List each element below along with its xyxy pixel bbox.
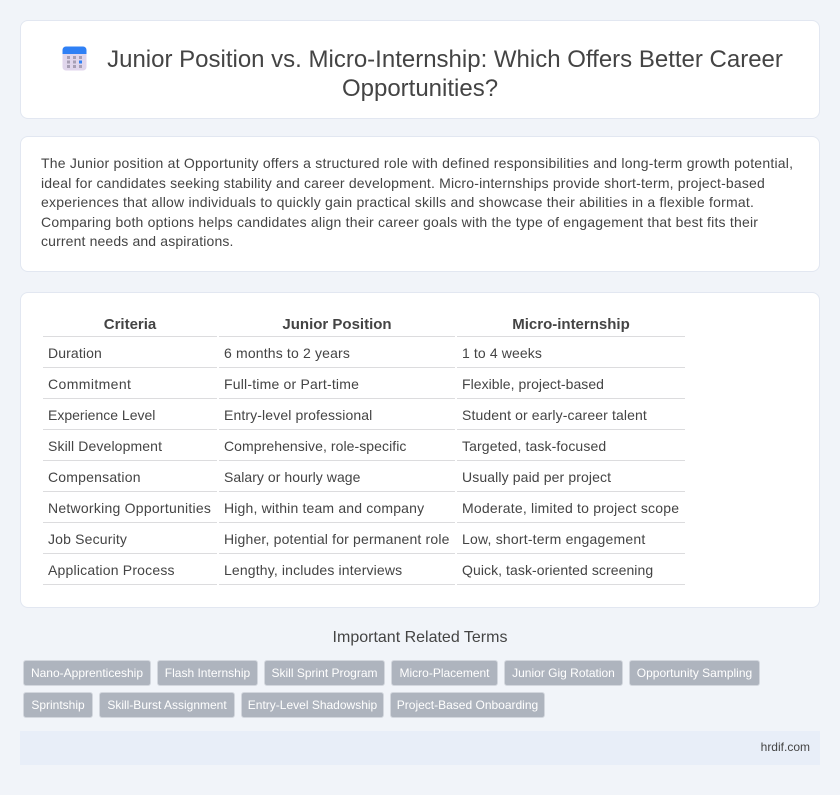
icon: calendar [62, 46, 86, 70]
table: comparison: Quick, task-oriented screening [462, 562, 653, 578]
table: comparison: Low, short-term engagement [462, 531, 645, 547]
tag list: related terms [23, 660, 760, 718]
table: comparison: Flexible, project-based [462, 376, 604, 392]
text block: introduction [41, 155, 793, 249]
table: comparison: High, within team and company [224, 500, 424, 516]
title: Opportunities? [342, 75, 498, 102]
table: comparison [43, 316, 685, 585]
title [107, 46, 783, 102]
table header [104, 316, 630, 333]
text block: introduction: Comparing both options helps candidates align their career goals with the type of engagement that best fits their [41, 214, 758, 230]
table: comparison: Application Process [48, 562, 175, 578]
tag list: related terms: Junior Gig Rotation [512, 666, 615, 680]
table: comparison: Compensation [48, 469, 141, 485]
panel: header [20, 20, 820, 119]
text block: introduction: current needs and aspirations. [41, 233, 234, 249]
table header: Junior Position [282, 316, 392, 333]
heading: related terms: Important Related Terms [333, 629, 507, 646]
footer bar [20, 731, 820, 765]
table header: Criteria [104, 316, 156, 333]
table: comparison: Job Security [48, 531, 127, 547]
table: comparison: 6 months to 2 years [224, 345, 350, 361]
tag list: related terms: Opportunity Sampling [637, 666, 752, 680]
footer source: hrdif.com [761, 740, 810, 754]
table: comparison: Comprehensive, role-specific [224, 438, 406, 454]
table: comparison: Higher, potential for permanent role [224, 531, 450, 547]
table: comparison: Moderate, limited to project scope [462, 500, 679, 516]
table: comparison: Student or early-career talent [462, 407, 647, 423]
table: comparison: Networking Opportunities [48, 500, 211, 516]
tag list: related terms: Project-Based Onboarding [397, 698, 538, 712]
tag list: related terms: Sprintship [31, 698, 85, 712]
text block: introduction: ideal for candidates seeking stability and career development. Micro-internships provide short-term, project-based [41, 175, 765, 191]
tag list: related terms: Nano-Apprenticeship [31, 666, 143, 680]
table: comparison: Commitment [48, 376, 131, 392]
table: comparison: Skill Development [48, 438, 162, 454]
panel: introduction [20, 136, 820, 272]
tag list: related terms: Flash Internship [165, 666, 250, 680]
tag list: related terms: Micro-Placement [399, 666, 490, 680]
table header: Micro-internship [512, 316, 630, 333]
table: comparison: Salary or hourly wage [224, 469, 360, 485]
table: comparison: 1 to 4 weeks [462, 345, 542, 361]
table: comparison: Usually paid per project [462, 469, 611, 485]
table: comparison: Experience Level [48, 407, 155, 423]
text block: introduction: experiences that allow individuals to quickly gain practical skills and showcase their abilities in a flexible format. [41, 194, 754, 210]
table: comparison: Lengthy, includes interviews [224, 562, 402, 578]
table: comparison: Entry-level professional [224, 407, 372, 423]
tag list: related terms: Skill-Burst Assignment [107, 698, 227, 712]
tag list: related terms: Entry-Level Shadowship [248, 698, 377, 712]
table: comparison: Targeted, task-focused [462, 438, 606, 454]
table: comparison: Full-time or Part-time [224, 376, 359, 392]
tag list: related terms: Skill Sprint Program [271, 666, 378, 680]
panel: comparison table [20, 292, 820, 608]
title: Junior Position vs. Micro-Internship: Which Offers Better Career [107, 46, 783, 73]
text block: introduction: The Junior position at Opportunity offers a structured role with defined responsibilities and long-term growth potential, [41, 155, 793, 171]
table: comparison: Duration [48, 345, 102, 361]
